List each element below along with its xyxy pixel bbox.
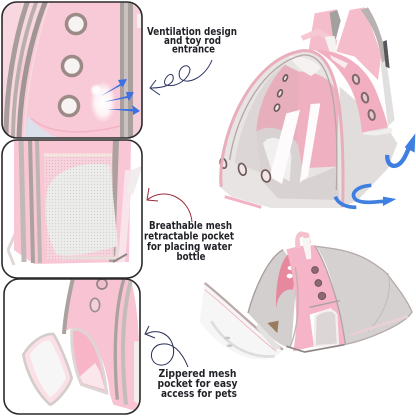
mesh extension — [316, 246, 412, 345]
text: mesh pocket callout — [144, 220, 234, 263]
pink back panel — [315, 50, 388, 133]
opening — [72, 329, 107, 393]
mesh side — [340, 87, 397, 207]
strap handle — [301, 28, 337, 55]
text: zippered pocket callout: Zippered mesh — [158, 368, 236, 380]
airflow highlight — [91, 82, 115, 122]
open door — [23, 334, 72, 405]
icon: blue curved arrows — [335, 147, 409, 207]
dome grommets — [219, 74, 288, 183]
inner rose strip — [256, 65, 299, 143]
top clip — [290, 56, 321, 76]
text: ventilation callout: entrance — [172, 44, 215, 56]
mesh pocket: white insert — [46, 164, 118, 256]
left shoulder strap — [309, 9, 341, 52]
arrow: navy curl to zippered pocket — [145, 326, 188, 367]
right shoulder strap — [336, 7, 381, 80]
base shadow — [286, 345, 345, 352]
text: zippered pocket callout: pocket for easy — [158, 378, 238, 390]
rear opening dome — [248, 250, 297, 347]
text: mesh pocket callout: bottle — [176, 251, 206, 263]
pink central band — [286, 245, 345, 351]
text: mesh pocket callout: Breathable mesh — [149, 220, 232, 232]
text: zippered pocket callout: access for pets — [161, 388, 237, 400]
right zipper band — [120, 0, 133, 140]
text: ventilation callout: Ventilation design — [147, 26, 237, 38]
lower mesh pocket — [315, 310, 338, 346]
inner mesh — [256, 128, 340, 200]
back grommets — [352, 74, 376, 121]
open front shell — [200, 283, 283, 359]
mesh pocket: outer pink mesh — [44, 155, 114, 261]
text: ventilation callout — [147, 26, 237, 56]
pack body — [14, 139, 131, 264]
panel: mesh pocket close-up — [0, 139, 144, 279]
panel: zippered front pocket close-up — [0, 278, 144, 416]
product: open dome with mesh extension — [200, 231, 412, 359]
text: mesh pocket callout: retractable pocket — [144, 230, 234, 242]
right zipper — [112, 139, 116, 262]
arrow: red curve to mesh pocket — [147, 188, 192, 222]
bottom curved seam — [24, 116, 56, 138]
white bars — [270, 110, 300, 184]
top handle and clip — [295, 231, 311, 248]
icon: grommets — [60, 14, 86, 116]
arrow: ventilation curl — [150, 60, 212, 95]
pink pack band — [63, 279, 139, 411]
dome rim — [221, 51, 343, 207]
body grommets — [97, 279, 107, 289]
text: zippered pocket callout — [158, 368, 238, 400]
panel: ventilation close-up — [0, 0, 144, 140]
clear upper left area — [235, 63, 286, 173]
band grommets — [312, 267, 326, 300]
strap behind — [8, 232, 16, 265]
inner pink wall — [256, 65, 339, 168]
text: mesh pocket callout: for placing water — [147, 241, 233, 253]
left zipper stripes — [3, 3, 42, 137]
transparent dome — [219, 51, 342, 208]
product: expanded backpack top view — [219, 7, 415, 208]
text: ventilation callout: and toy rod — [164, 35, 221, 47]
icon: blue airflow arrows — [101, 79, 140, 115]
